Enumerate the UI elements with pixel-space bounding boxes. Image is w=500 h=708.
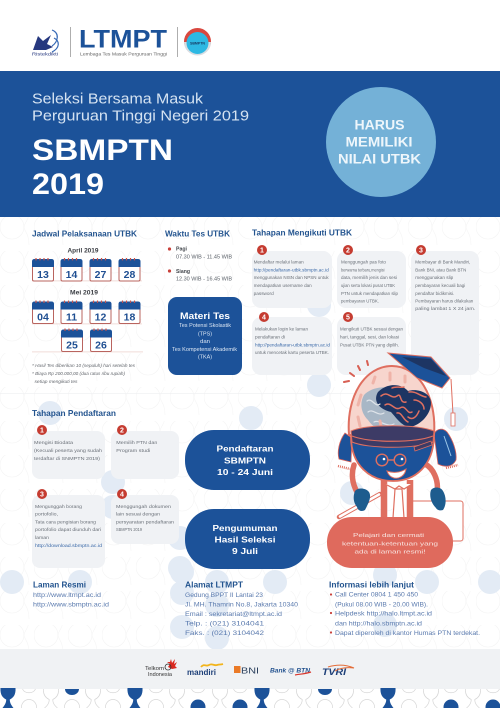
header banner: [0, 71, 500, 217]
header logos: [32, 26, 211, 57]
step 3: Mengunggah borang: [35, 504, 82, 509]
step 1: [252, 245, 332, 308]
smile: [387, 469, 406, 478]
date pill: pengumuman: Hasil Seleksi: [214, 534, 276, 544]
step 1: Mengisi Biodata: [34, 440, 74, 445]
callout: pelajari ketentuan: ada di laman resmi!: [354, 550, 426, 556]
calendars: april: 27: [95, 269, 106, 281]
footer info: informasi lebih lanjut: dan http://halo.sbmptn.ac.id: [335, 622, 422, 628]
step 4: persyaratan pendaftaran: [116, 520, 175, 524]
calendars: mei: 25: [66, 340, 78, 352]
step 4: pendaftaran di: [255, 334, 285, 340]
footer info: laman resmi: [33, 580, 109, 608]
session: pagi: Pagi: [176, 246, 188, 252]
footer info: informasi lebih lanjut: Dapat diperoleh di kantor Humas PTN terdekat.: [335, 631, 480, 637]
date pill: pendaftaran: [185, 430, 310, 490]
step 3: pendaftar bidikmisi.: [415, 291, 454, 296]
ears: [338, 429, 458, 469]
panel: materi tes: Materi Tes: [180, 310, 230, 321]
step 4: [111, 489, 179, 544]
logo: TVRI: TVRI: [322, 667, 346, 678]
hands: [354, 487, 446, 511]
illustration: brain character: [338, 353, 463, 541]
glass dome: [349, 366, 434, 435]
session: siang: [168, 269, 233, 282]
step 2: [111, 425, 179, 479]
step 1: (Kecuali peserta yang sudah: [34, 448, 103, 453]
calendars: mei: 04: [37, 312, 49, 324]
step 5: [337, 312, 406, 375]
logo: telkom indonesia: Telkom: [145, 666, 165, 672]
session: pagi: 07.30 WIB - 11.45 WIB: [176, 254, 233, 260]
step 5: Pusat UTBK PTN yang dipilih.: [340, 342, 399, 348]
step 2: berwarna terbaru,mengisi: [341, 268, 384, 272]
step 3: [411, 245, 479, 375]
date pill: pendaftaran: Pendaftaran: [216, 444, 274, 454]
step 5: 5: [346, 314, 350, 322]
step 2: 2: [120, 428, 124, 434]
calendars: april: 13: [37, 269, 49, 281]
step 3: [32, 489, 105, 568]
step 1: mendapatkan username dan: [254, 283, 312, 288]
callout: pelajari ketentuan: Pelajari dan cermati: [353, 533, 424, 539]
panel: jadwal pelaksanaan UTBK: [32, 228, 143, 384]
LTMPT wordmark: LTMPT: [79, 26, 167, 54]
step 3: 3: [419, 248, 423, 254]
logo: telkom indonesia: [145, 659, 177, 678]
date pill: pengumuman: [185, 509, 310, 569]
step 4: SBMPTN 2019: [116, 527, 142, 532]
footer info: alamat LTMPT: Jl. MH. Thamrin No.8, Jakarta 10340: [185, 602, 299, 608]
footer info: alamat LTMPT: [185, 580, 299, 637]
step 1: http://pendaftaran-utbk.sbmptn.ac.id: [254, 268, 329, 272]
step 4: lain sesuai dengan: [116, 512, 161, 517]
month label: April 2019: [68, 248, 99, 254]
footer info: laman resmi: Laman Resmi: [33, 580, 86, 590]
subtitle: [32, 92, 249, 124]
step 2: 2: [346, 248, 350, 254]
footer info: alamat LTMPT: Gedung BPPT II Lantai 23: [185, 593, 264, 599]
main title: 2019: [32, 168, 104, 201]
footer info: informasi lebih lanjut: (Pukul 08.00 WIB - 20.00 WIB).: [335, 602, 428, 608]
LTMPT tagline: Lembaga Tes Masuk Perguruan Tinggi: [80, 52, 167, 56]
logo: telkom indonesia: Indonesia: [148, 672, 172, 678]
callout: pelajari ketentuan: ketentuan-ketentuan yang: [342, 542, 438, 548]
step 3: pembayaran kecuali bagi: [415, 283, 465, 288]
notes: * Hasil Tes diberikan 10 (sepuluh) hari setelah tes: [32, 363, 136, 368]
step 2: PTN untuk mendapatkan slip: [341, 291, 398, 296]
notes: setiap mengikuti tes: [34, 379, 78, 384]
calendars: april: 14: [66, 269, 77, 281]
subtitle: Seleksi Bersama Masuk: [32, 92, 204, 108]
logo: bank BTN: Bank @ BTN: [270, 668, 310, 674]
step 3: Pembayaran harus dilakukan: [415, 298, 474, 304]
step 4: http://pendaftaran-utbk.sbmptn.ac.id: [255, 342, 330, 348]
torso: [384, 480, 412, 518]
step 3: Bank BNI, atau Bank BTN: [415, 268, 466, 272]
session: pagi: [168, 246, 233, 260]
step 3: portofolio dapat diunduh dari: [35, 527, 101, 532]
step 2: data, memilih jenis dan sesi: [341, 275, 397, 280]
step 4: Melakukan login ke laman: [255, 326, 308, 332]
panel: materi tes: Tes Kompetensi Akademik: [172, 347, 238, 353]
heading: Jadwal Pelaksanaan UTBK: [32, 228, 137, 238]
footer info: laman resmi: http://www.ltmpt.ac.id: [33, 593, 101, 599]
session: siang: 12.30 WIB - 16.45 WIB: [176, 276, 233, 282]
tablet: [410, 501, 463, 541]
footer info: informasi lebih lanjut: Informasi lebih lanjut: [329, 580, 414, 590]
callout: harus memiliki nilai UTBK: HARUS: [354, 118, 405, 132]
graduation cap: [388, 353, 455, 426]
icon: SBMPTN logo: SBMPTN: [190, 42, 206, 46]
brain: dark lobe: [376, 385, 431, 427]
step 2: Menggungah pas foto: [341, 260, 386, 264]
step 1: menggunakan NISN dan NPSN untuk: [254, 275, 329, 280]
icon: SBMPTN logo: [184, 28, 211, 56]
footer info: alamat LTMPT: Email : sekretariat@ltmpt.ac.id: [185, 612, 282, 618]
panel: materi tes: (TKA): [198, 354, 212, 360]
step 4: Menggungah dokumen: [116, 504, 172, 509]
calendars: mei: 18: [124, 312, 135, 324]
panel: materi tes: (TPS): [198, 332, 212, 338]
pen: [339, 494, 380, 517]
step 4: 4: [262, 314, 266, 322]
arms: [352, 464, 437, 495]
brain: grey lobe: [361, 387, 408, 432]
step 3: http://download.sbmptn.ac.id: [35, 543, 103, 548]
brain folds: [381, 387, 426, 422]
month label: Mei 2019: [70, 290, 99, 296]
panel: materi tes: Tes Potensi Skolastik: [179, 323, 232, 329]
date pill: pengumuman: 9 Juli: [232, 546, 258, 556]
subtitle: Perguruan Tinggi Negeri 2019: [32, 108, 249, 124]
heading: Waktu Tes UTBK: [165, 228, 230, 238]
callout: harus memiliki nilai UTBK: MEMILIKI: [346, 134, 412, 150]
date pill: pendaftaran: SBMPTN: [224, 456, 266, 466]
logo: BNI: [234, 666, 259, 676]
step 5: Mengikuti UTBK sesuai dengan: [340, 326, 403, 332]
footer info: alamat LTMPT: Telp. : (021) 3104041: [185, 622, 265, 628]
step 3: laman: [35, 535, 49, 540]
footer info: laman resmi: http://www.sbmptn.ac.id: [33, 602, 109, 608]
heading: Tahapan Pendaftaran: [32, 408, 116, 418]
collar band: [351, 426, 434, 447]
step 1: password: [254, 291, 274, 296]
session: siang: Siang: [176, 269, 190, 275]
icon: ristekdikti logo: Ristekdikti: [32, 52, 58, 56]
footer info: informasi lebih lanjut: [329, 580, 480, 637]
main title: [32, 134, 173, 201]
face: [351, 437, 434, 481]
date pill: pendaftaran: 10 - 24 Juni: [217, 467, 273, 477]
step 1: 1: [260, 248, 264, 254]
step 3: paling lambat 1 X 24 jam.: [415, 306, 475, 311]
calendars: april: [32, 258, 140, 281]
step 2: [337, 245, 406, 308]
step 1: terdaftar di SNMPTN 2019): [34, 456, 101, 461]
calendars: mei: [32, 300, 140, 352]
panel: tahapan mengikuti UTBK: [252, 228, 479, 375]
step 4: [252, 312, 332, 375]
logo: TVRI: [322, 665, 354, 678]
step 1: [32, 425, 105, 479]
footer info: informasi lebih lanjut: Helpdesk http://halo.ltmpt.ac.id: [335, 612, 432, 618]
glasses: [376, 454, 406, 466]
panel: tahapan pendaftaran: [32, 408, 179, 568]
step 3: portofolio,: [35, 512, 58, 517]
calendars: mei: 11: [66, 312, 77, 324]
step 5: hari, tanggal, sesi, dan lokasi: [340, 334, 399, 340]
panel: materi tes: [168, 297, 242, 375]
callout: harus memiliki nilai UTBK: [326, 87, 436, 197]
calendars: mei: 26: [95, 340, 107, 352]
step 1: Mendaftar melalui laman: [254, 260, 304, 264]
main title: SBMPTN: [32, 134, 173, 167]
footer info: alamat LTMPT: Alamat LTMPT: [185, 580, 244, 590]
panel: waktu tes UTBK: [165, 228, 233, 282]
calendars: april: 28: [124, 269, 135, 281]
heading: Tahapan Mengikuti UTBK: [252, 228, 352, 238]
sponsor band: [0, 649, 500, 689]
step 1: 1: [40, 428, 44, 434]
step 2: ujian serta lokasi pusat UTBK: [341, 283, 396, 288]
notes: * Biaya Rp 200.000,00 (dua ratus ribu rupiah): [32, 371, 126, 376]
step 4: 4: [120, 492, 124, 498]
logo: BNI: BNI: [241, 666, 259, 676]
callout: harus memiliki nilai UTBK: NILAI UTBK: [338, 152, 421, 166]
step 2: Memilih PTN dan: [116, 440, 158, 445]
step 3: Tata cara pengisian borang: [35, 520, 96, 524]
calendars: mei: 12: [95, 312, 106, 324]
step 4: untuk mencetak kartu peserta UTBK.: [255, 350, 329, 355]
logo: mandiri: [187, 664, 223, 677]
callout: pelajari ketentuan: [327, 517, 453, 568]
spark lines: [344, 361, 368, 382]
step 3: Membayar di Bank Mandiri,: [415, 260, 470, 264]
step 3: 3: [40, 492, 44, 498]
notes: [32, 363, 136, 384]
icon: ristekdikti logo: [32, 30, 58, 56]
dome highlights: [358, 373, 405, 431]
step 2: Program studi: [116, 448, 150, 453]
footer info: informasi lebih lanjut: Call Center 0804 1 450 450: [335, 592, 419, 598]
step 3: menggunakan slip: [415, 275, 454, 280]
step 2: pembayaran UTBK.: [341, 298, 379, 304]
panel: materi tes: dan: [200, 339, 210, 345]
date pill: pengumuman: Pengumuman: [212, 523, 278, 533]
logo: mandiri: mandiri: [187, 668, 216, 677]
footer info: alamat LTMPT: Faks. : (021) 3104042: [185, 631, 265, 637]
